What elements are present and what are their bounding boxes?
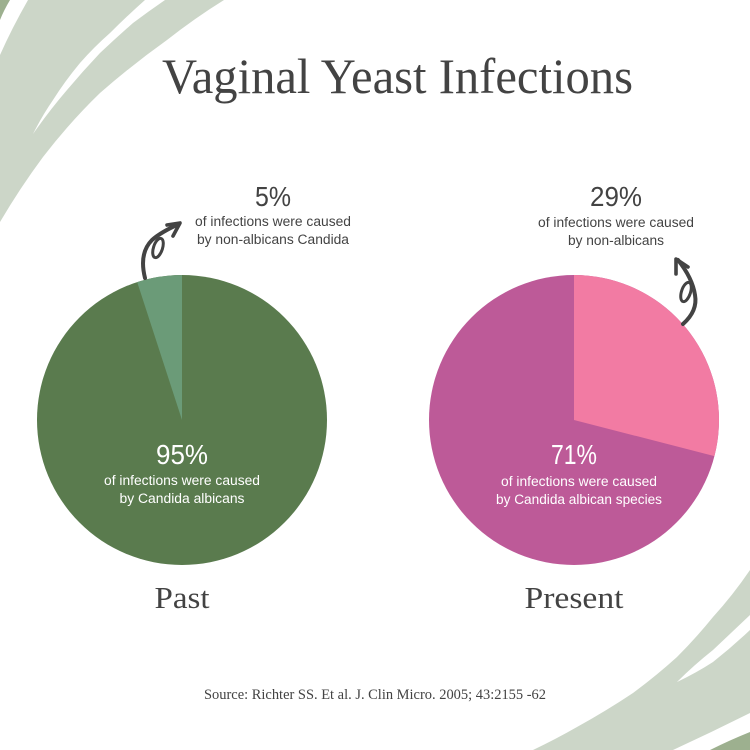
pie chart: present	[429, 275, 719, 565]
source note: Source: Richter SS. Et al. J. Clin Micro. 2005; 43:2155 -62	[204, 687, 546, 703]
title: Vaginal Yeast Infections	[162, 48, 633, 104]
label: 71% Candida albican species: of infections were caused	[501, 474, 657, 489]
callout: 5% non-albicans: by non-albicans Candida	[197, 232, 349, 247]
heading: present: Present	[524, 580, 624, 615]
label: 71% Candida albican species: 71%	[551, 439, 597, 470]
label: 95% Candida albicans: 95%	[156, 439, 208, 470]
label: 71% Candida albican species	[496, 439, 662, 507]
label: 95% Candida albicans: by Candida albicans	[120, 491, 245, 506]
label: 95% Candida albicans: of infections were caused	[104, 473, 260, 488]
heading: past: Past	[154, 580, 210, 615]
arrow: present	[676, 259, 695, 324]
decorative leaves: top left	[0, 0, 224, 222]
pie chart: past	[37, 275, 327, 565]
callout: 29% non-albicans: by non-albicans	[568, 233, 664, 248]
callout: 5% non-albicans	[195, 181, 351, 247]
callout: 5% non-albicans: 5%	[255, 181, 291, 212]
label: 95% Candida albicans	[104, 439, 260, 506]
arrow: past	[143, 223, 180, 278]
callout: 29% non-albicans	[538, 181, 694, 248]
callout: 5% non-albicans: of infections were caused	[195, 214, 351, 229]
decorative leaves: bottom right	[533, 570, 750, 750]
panel: past	[37, 181, 351, 615]
callout: 29% non-albicans: of infections were caused	[538, 215, 694, 230]
panel: present	[429, 181, 719, 615]
callout: 29% non-albicans: 29%	[590, 181, 642, 212]
label: 71% Candida albican species: by Candida albican species	[496, 492, 662, 507]
